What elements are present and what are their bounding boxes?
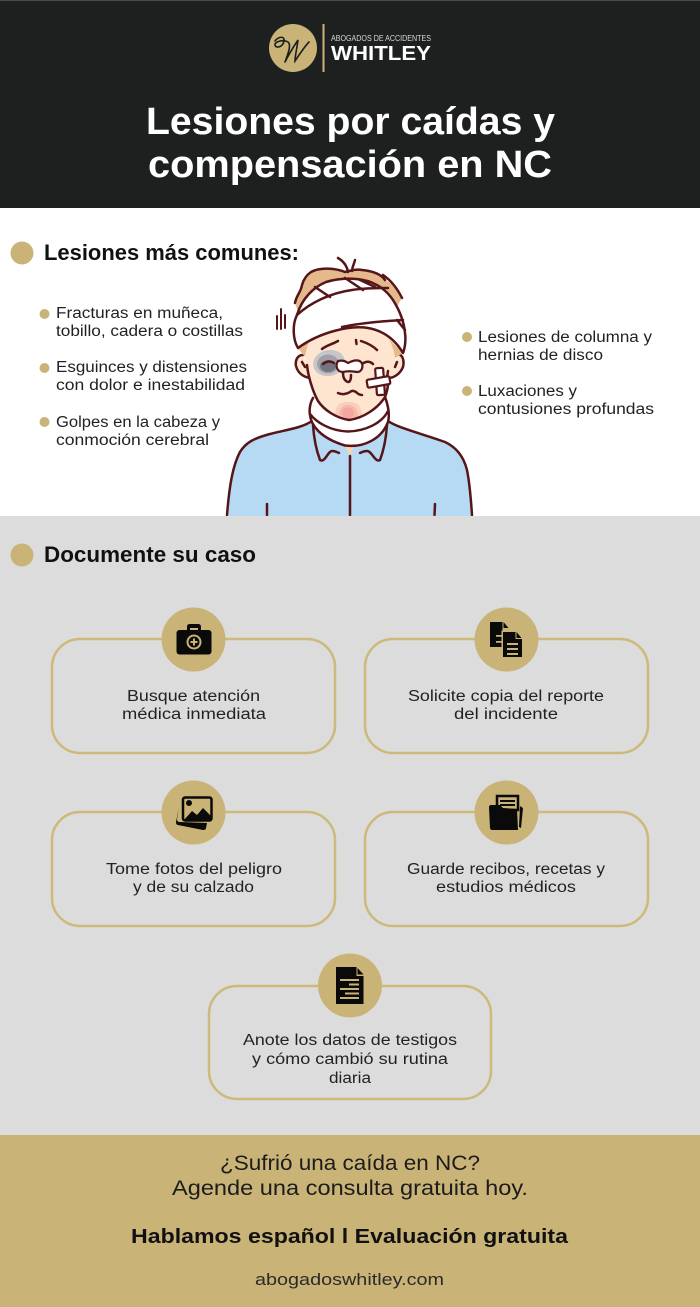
item: dislocations: Luxaciones y [478,383,577,400]
logo [269,24,432,72]
face outline [307,365,389,420]
title: compensación en NC [148,144,552,186]
card: witnesses: diaria [329,1070,371,1087]
card: witnesses: Anote los datos de testigos [243,1032,457,1049]
card: witnesses [209,954,491,1099]
bruise on throat [335,402,362,420]
sideburns [297,336,403,358]
heading: injuries: Lesiones más comunes: [44,240,299,265]
heading: document: Documente su caso [44,542,256,567]
card: receipts: Guarde recibos, recetas y [407,861,605,878]
neck brace [310,397,389,446]
item: head injuries [40,414,220,449]
shirt [227,420,472,516]
panel: common injuries [0,208,700,516]
icon: documents [490,622,522,657]
hair [295,269,402,318]
title: Lesiones por caídas y [146,101,555,143]
card: receipts [365,780,648,926]
item: dislocations: contusiones profundas [478,401,654,418]
footer website: abogadoswhitley.com [255,1270,444,1289]
item: dislocations [462,383,654,418]
item: fractures: Fracturas en muñeca, [56,305,223,322]
footer question: ¿Sufrió una caída en NC? [220,1152,480,1175]
ears [296,354,403,378]
icon: photos [176,798,212,830]
item: head injuries: conmoción cerebral [56,432,209,449]
item: spine [462,329,652,364]
card: incident report: Solicite copia del reporte [408,688,604,705]
facial features [322,340,388,395]
icon: medical kit [176,624,212,654]
black eye [311,347,347,379]
panel: footer call to action [0,1135,700,1307]
item: spine: Lesiones de columna y [478,329,652,346]
panel: header [0,0,700,208]
card: photos: Tome fotos del peligro [106,861,282,878]
item: fractures: tobillo, cadera o costillas [56,323,243,340]
item: spine: hernias de disco [478,347,603,364]
bandage [294,279,405,353]
footer invitation: Agende una consulta gratuita hoy. [172,1177,528,1200]
panel: document your case [0,516,700,1135]
item: sprains [40,359,247,394]
item: fractures [40,305,243,340]
card: receipts: estudios médicos [436,879,576,896]
section marker [10,242,34,264]
item: sprains: con dolor e inestabilidad [56,377,245,394]
logo emblem [269,24,317,72]
logo name: WHITLEY [331,43,432,65]
shake marks [277,309,285,329]
card: medical attention [52,608,335,753]
item: sprains: Esguinces y distensiones [56,359,247,376]
card: medical attention: Busque atención [127,688,260,705]
icon: folder [489,796,523,830]
cheek plaster [366,368,391,395]
item: head injuries: Golpes en la cabeza y [56,414,220,431]
card: photos: y de su calzado [133,879,254,896]
logo divider [322,24,324,72]
title [146,101,555,186]
card: incident report: del incidente [454,706,558,723]
footer languages: Hablamos español l Evaluación gratuita [131,1226,569,1248]
section marker [10,544,34,566]
card: medical attention: médica inmediata [122,706,266,723]
injury list right [462,329,654,418]
injury list left [40,305,247,449]
card: incident report [365,608,648,753]
illustration: injured man [227,258,472,516]
card: witnesses: y cómo cambió su rutina [252,1051,448,1068]
icon: document [336,967,364,1004]
nose bandage [337,360,362,372]
card: photos [52,780,335,926]
logo small text: ABOGADOS DE ACCIDENTES [331,34,431,43]
collar [345,446,354,457]
face [302,327,396,420]
